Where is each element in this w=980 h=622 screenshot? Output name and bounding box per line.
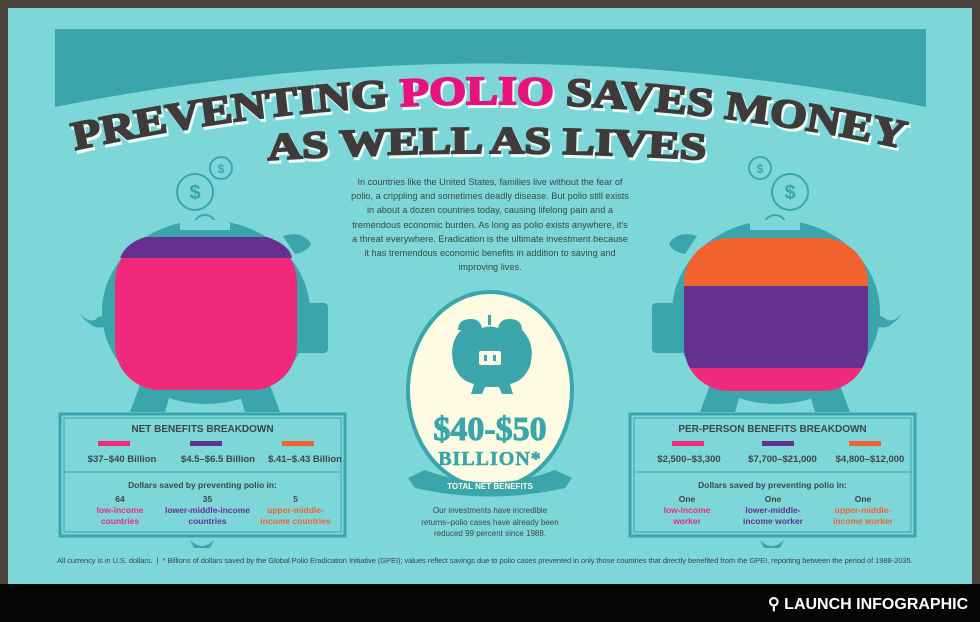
left pig: $ <box>218 162 225 176</box>
title: AS WELL AS LIVES <box>269 130 708 164</box>
right panel: $2,500–$3,300 <box>657 454 721 465</box>
left panel: $.41–$.43 Billion <box>268 454 342 465</box>
title: PREVENTING POLIO SAVES MONEY <box>71 80 912 154</box>
left panel <box>88 424 342 526</box>
left panel: 35 <box>203 494 212 504</box>
left panel: upper-middle-income countries <box>260 505 331 526</box>
right panel: lower-middle-income worker <box>743 505 803 526</box>
intro text: In countries like the United States, families live without the fear of polio, a crippling and sometimes deadly disease. But polio still exists in about a dozen countries today, causing lifelong pain and a tremendous economic burden. As long as polio exists anywhere, it's a threat everywhere. Eradication is the ultimate investment because it has tremendous economic benefits in addition to saving and improving lives. <box>351 177 629 272</box>
right pig: $ <box>757 162 764 176</box>
left panel: $4.5–$6.5 Billion <box>181 454 255 465</box>
right panel: One <box>679 494 695 504</box>
banner <box>55 29 926 107</box>
footnote: All currency is in U.S. dollars. | * Billions of dollars saved by the Global Polio Eradication Initiative (GPEI); values reflect savings due to polio cases prevented in only those countries that directly benefited from the GPEI, reporting between the period of 1988-2035. <box>57 556 913 565</box>
panel frames <box>60 414 915 536</box>
left panel: 64 <box>115 494 125 504</box>
left panel: $37–$40 Billion <box>88 454 156 465</box>
center egg: $40-$50 <box>433 411 547 448</box>
right panel: $4,800–$12,000 <box>836 454 904 465</box>
left pig <box>80 157 328 412</box>
right panel: One <box>765 494 781 504</box>
right panel: Dollars saved by preventing polio in: <box>698 480 847 490</box>
left panel: low-income countries <box>97 505 143 526</box>
left pig: $ <box>189 182 201 204</box>
right pig: $ <box>784 182 796 204</box>
title: AS WELL AS LIVES <box>267 127 706 161</box>
right panel <box>657 424 904 526</box>
center egg: BILLION* <box>438 448 542 470</box>
left panel: 5 <box>293 494 298 504</box>
right panel: low-income worker <box>664 505 710 526</box>
right panel: One <box>855 494 871 504</box>
title: PREVENTING POLIO SAVES MONEY <box>69 76 910 151</box>
left panel: Dollars saved by preventing polio in: <box>128 480 277 490</box>
center egg <box>408 292 572 496</box>
right panel: upper-middle-income worker <box>833 505 893 526</box>
left panel: NET BENEFITS BREAKDOWN <box>131 424 274 435</box>
launch button: ⚲ LAUNCH INFOGRAPHIC <box>768 596 968 613</box>
center note: Our investments have incredible returns–polio cases have already been reduced 99 percent since 1988. <box>421 506 559 538</box>
left panel: lower-middle-income countries <box>165 505 250 526</box>
right pig <box>652 157 902 412</box>
right panel: $7,700–$21,000 <box>748 454 817 465</box>
center egg: TOTAL NET BENEFITS <box>447 482 534 491</box>
right panel: PER-PERSON BENEFITS BREAKDOWN <box>678 424 867 435</box>
